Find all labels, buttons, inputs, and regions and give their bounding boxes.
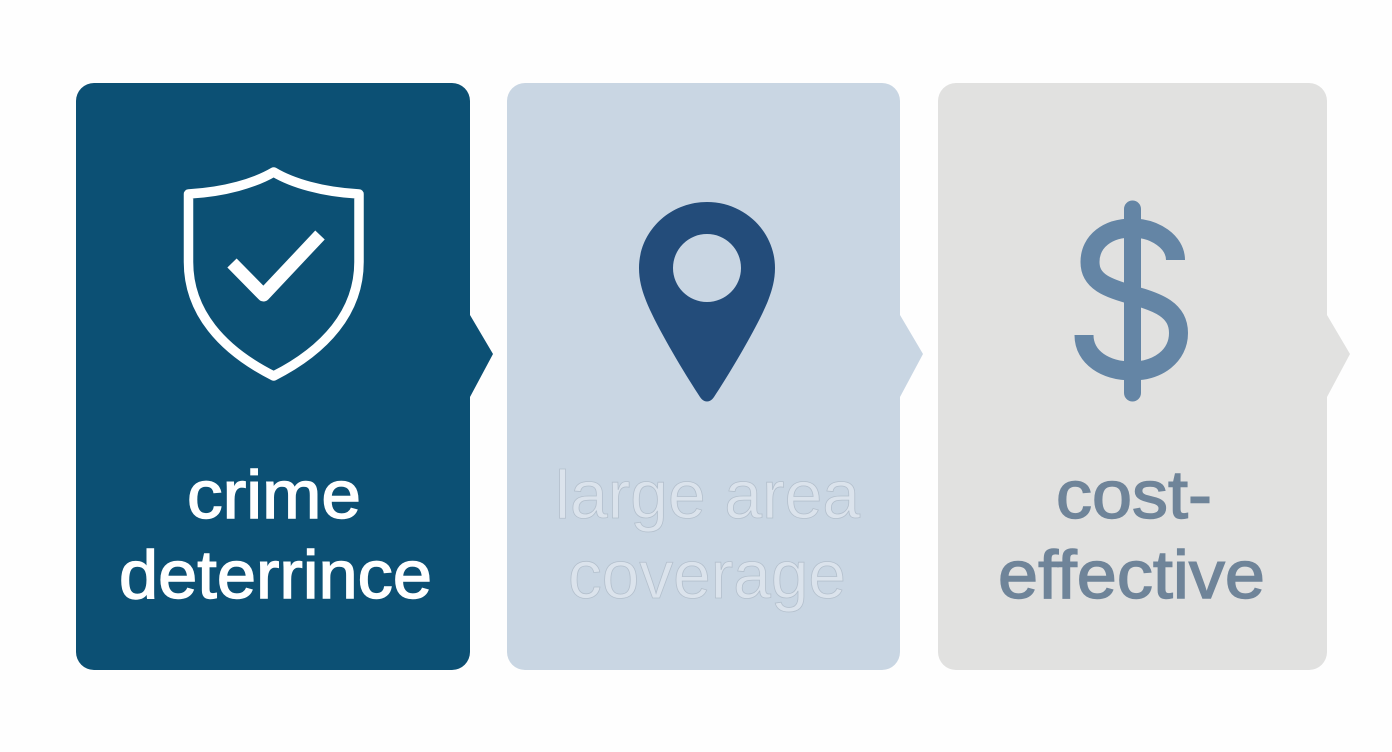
heading: cost-effective [998, 457, 1265, 613]
heading: crime deterrince: deterrince [119, 537, 432, 613]
heading: cost-effective: effective [998, 537, 1265, 613]
icon: location pin [639, 202, 775, 402]
heading: crime deterrince: crime [187, 457, 361, 533]
heading: large area coverage: large area [555, 457, 860, 533]
heading: large area coverage: coverage [568, 537, 846, 613]
icon: dollar sign [1084, 209, 1178, 393]
heading: cost-effective: cost- [1056, 457, 1212, 533]
panel: large area coverage [507, 83, 923, 670]
heading: crime deterrince [119, 457, 432, 613]
card background with arrow [76, 83, 493, 670]
panel: cost-effective [938, 83, 1350, 670]
card background with arrow [938, 83, 1350, 670]
card background with arrow [507, 83, 923, 670]
heading: large area coverage [555, 457, 860, 613]
icon: shield with check mark [188, 172, 359, 376]
panel: crime deterrence [76, 83, 493, 670]
